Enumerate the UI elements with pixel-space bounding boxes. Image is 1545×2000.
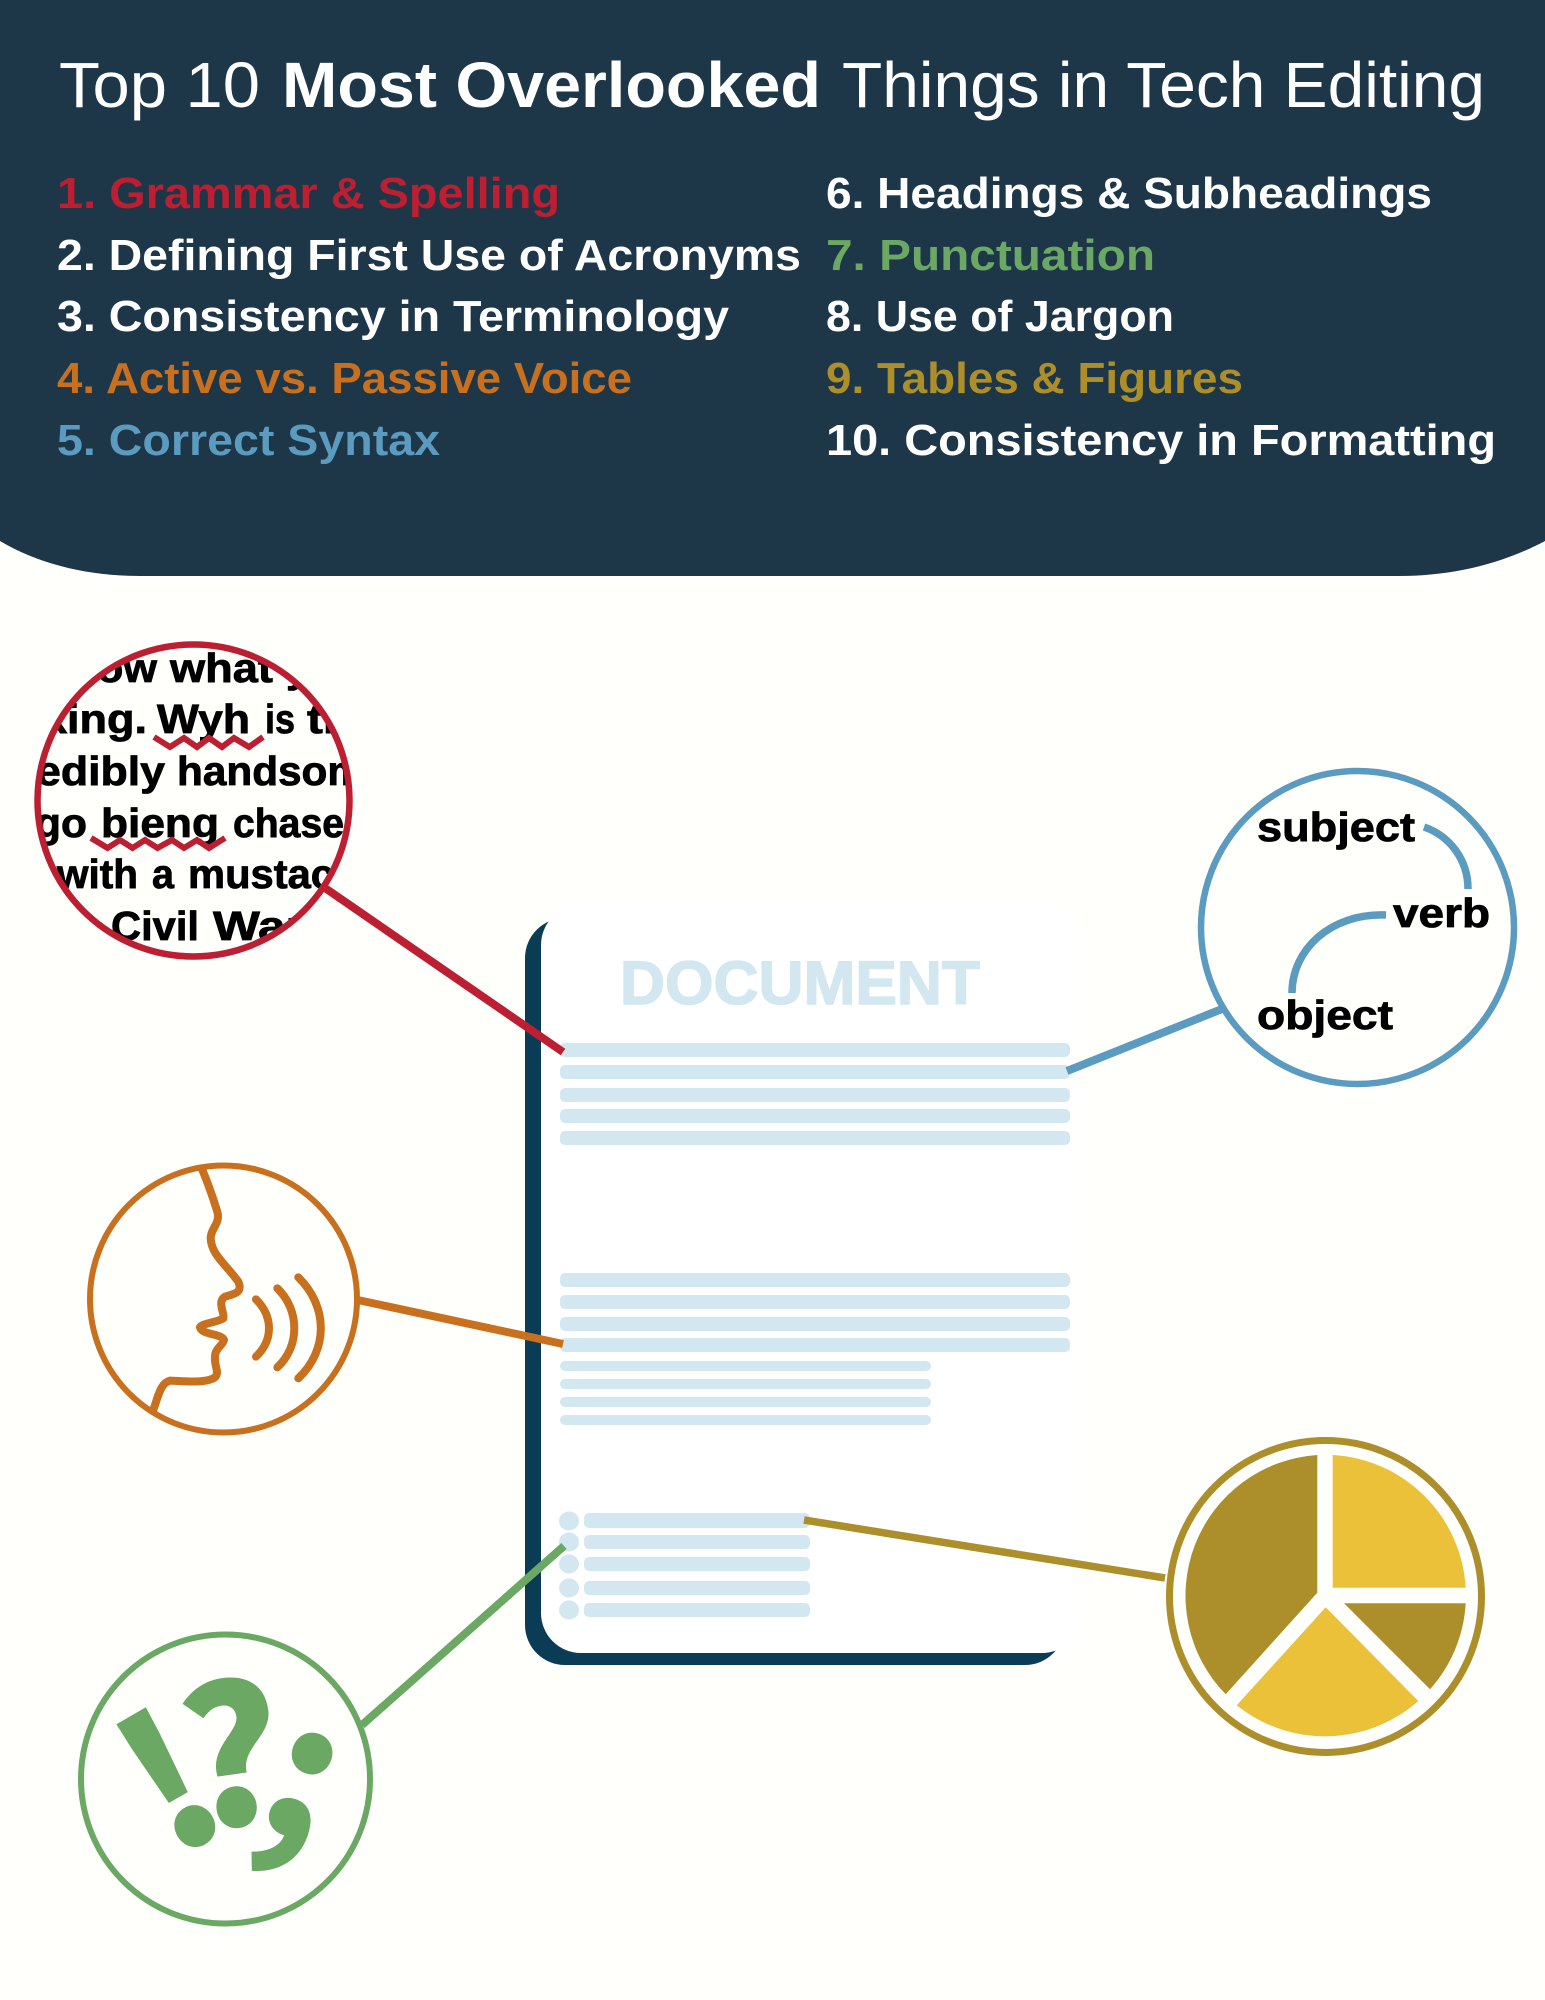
top 10 list: right column: 7. Punctuation: [826, 231, 1155, 280]
misspelled sample text: king.: [42, 696, 147, 742]
title: [59, 49, 1485, 121]
top 10 list: right column: [826, 169, 1496, 465]
word: object: object: [1257, 992, 1393, 1038]
red squiggle under bieng: [91, 838, 225, 848]
misspelled sample text: Civil: [111, 903, 199, 949]
word: subject: subject: [1257, 804, 1415, 850]
misspelled sample text: a: [152, 851, 175, 897]
title: Most Overlooked: [282, 49, 821, 121]
top 10 list: left column: 1. Grammar & Spelling: [57, 169, 560, 218]
semicolon: ;: [232, 1618, 389, 1899]
pie slice: top yellow: [1333, 1455, 1466, 1588]
top 10 list: right column: 9. Tables & Figures: [826, 354, 1243, 403]
red squiggle under Wyh: [154, 737, 263, 747]
icon: speaking face: [90, 1166, 357, 1432]
text lines: second paragraph: [560, 1273, 1070, 1425]
pie slice: bottom yellow: [1237, 1607, 1418, 1736]
icon: syntax diagram: [1201, 771, 1514, 1084]
pie slice: small dark: [1344, 1603, 1466, 1689]
pie slice: large dark: [1185, 1455, 1317, 1694]
misspelled sample text: ow: [97, 645, 157, 691]
top 10 list: right column: 10. Consistency in Formatting: [826, 416, 1496, 465]
icon: grammar magnifier: [35, 644, 365, 956]
question mark: ?: [161, 1600, 300, 1887]
misspelled sample text: is: [265, 696, 295, 742]
misspelled sample text: th: [307, 696, 352, 742]
top 10 list: right column: 6. Headings & Subheadings: [826, 169, 1432, 218]
misspelled sample text: with: [56, 851, 138, 897]
top 10 list: right column: 8. Use of Jargon: [826, 292, 1174, 341]
word: verb: verb: [1393, 890, 1490, 936]
misspelled sample text: [41, 652, 346, 940]
sound waves: [256, 1277, 321, 1378]
arc verb to object: [1292, 915, 1386, 993]
misspelled sample text: chase: [233, 800, 344, 846]
misspelled sample text: y: [286, 645, 310, 691]
bullet list: [559, 1512, 810, 1620]
title: Top 10: [59, 49, 260, 121]
misspelled sample text: edibly: [36, 748, 165, 794]
top 10 list: left column: 3. Consistency in Terminology: [57, 292, 730, 341]
misspelled sample text: go: [35, 800, 87, 846]
misspelled sample text: handsom: [177, 748, 365, 794]
exclamation mark: !: [61, 1633, 264, 1908]
document: [525, 905, 1082, 1665]
arc subject to verb: [1424, 827, 1468, 889]
connector: syntax: [1067, 1009, 1222, 1071]
icon: punctuation marks: [61, 1600, 389, 1924]
misspelled sample text: War: [213, 903, 305, 949]
connector: voice: [353, 1299, 563, 1344]
text lines: first paragraph: [560, 1043, 1070, 1145]
misspelled sample text: bieng: [101, 800, 219, 846]
connector: punctuation: [362, 1546, 564, 1725]
top 10 list: left column: 5. Correct Syntax: [57, 416, 441, 465]
icon: pie chart: [1170, 1440, 1482, 1752]
connector: tables and figures: [804, 1520, 1165, 1578]
header banner: [0, 0, 1545, 576]
face profile: [153, 1168, 240, 1412]
document heading: DOCUMENT: [620, 949, 980, 1017]
misspelled sample text: what: [169, 645, 273, 691]
misspelled sample text: Wyh: [157, 696, 250, 742]
top 10 list: left column: [57, 169, 801, 465]
connector: grammar and spelling: [325, 888, 563, 1052]
misspelled sample text: mustac: [188, 851, 334, 897]
top 10 list: left column: 2. Defining First Use of Acronyms: [57, 231, 801, 280]
title: Things in Tech Editing: [842, 49, 1485, 121]
top 10 list: left column: 4. Active vs. Passive Voice: [57, 354, 632, 403]
